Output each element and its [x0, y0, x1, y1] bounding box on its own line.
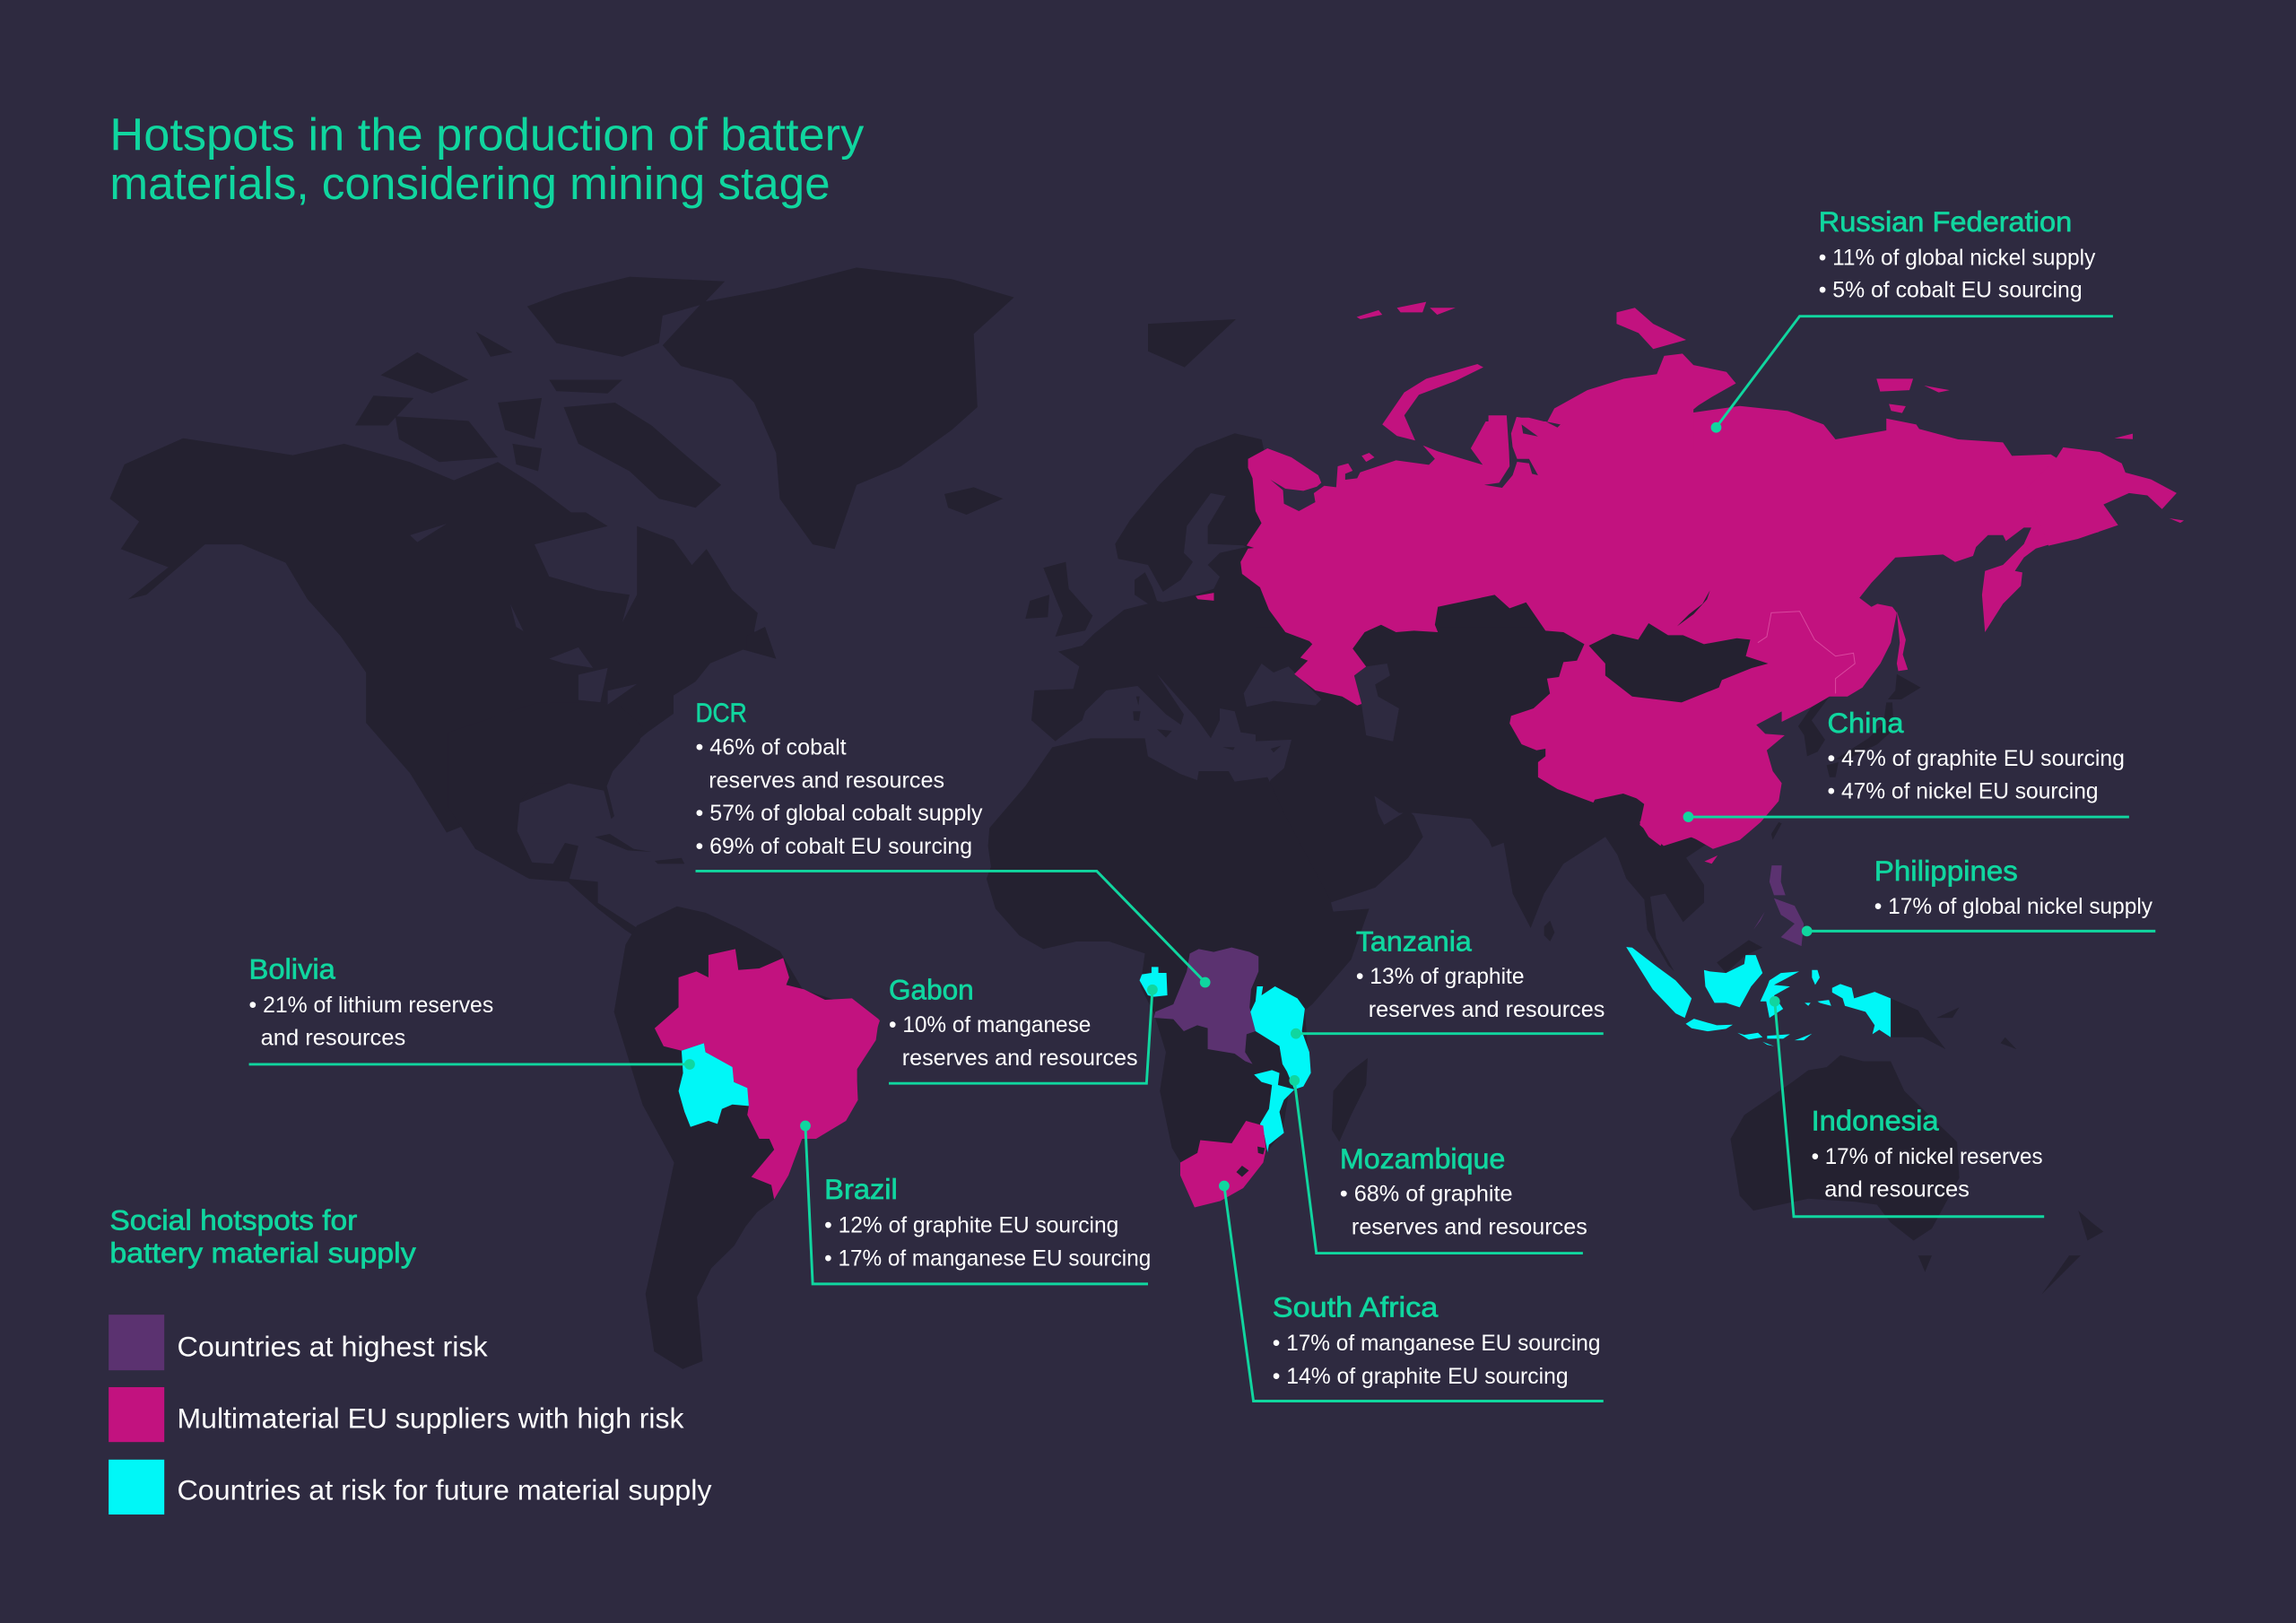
- callout: Russian Federation: Russian Federation: [1819, 206, 2072, 238]
- country: Gabon: [1140, 967, 1168, 997]
- callout: Russian Federation: • 5% of cobalt EU sourcing: [1819, 278, 2083, 302]
- western Russia and western China: [1240, 421, 1713, 846]
- country: South Africa: [1180, 1121, 1266, 1207]
- callout: Bolivia: • 21% of lithium reserves: [249, 994, 493, 1018]
- callout: Bolivia: Bolivia: [249, 953, 336, 985]
- land: North America and Greenland: [109, 267, 1014, 833]
- callout: DCR: • 57% of global cobalt supply: [696, 802, 983, 826]
- callout: Bolivia: [249, 953, 695, 1070]
- callout: Mozambique: reserves and resources: [1352, 1215, 1587, 1239]
- Gulf of Ob: [1484, 415, 1561, 488]
- inland seas of Eurasia: [1244, 664, 1321, 707]
- callout: South Africa: South Africa: [1273, 1292, 1439, 1324]
- callout: South Africa: [1219, 1181, 1604, 1401]
- title: Hotspots in the production of battery: [109, 108, 865, 160]
- land: South America: [614, 907, 880, 1369]
- title: materials, considering mining stage: [109, 158, 831, 209]
- callout: Mozambique: • 68% of graphite: [1340, 1183, 1513, 1207]
- callout: Tanzania: • 13% of graphite: [1356, 965, 1525, 989]
- legend heading: [109, 1204, 416, 1269]
- land: Svalbard: [1148, 319, 1236, 368]
- callout: Gabon: Gabon: [889, 974, 974, 1005]
- callout: China: [1683, 707, 2129, 822]
- callout: Indonesia: Indonesia: [1812, 1105, 1939, 1136]
- country: Mozambique: [1254, 1070, 1294, 1152]
- Mongolia: [1589, 623, 1769, 702]
- callout: DCR: DCR: [696, 699, 747, 728]
- callout: China: China: [1828, 707, 1904, 739]
- legend item: multimaterial EU suppliers: Multimaterial EU suppliers with high risk: [178, 1402, 684, 1435]
- eastern Russia and eastern China: [1632, 386, 2099, 849]
- callout: DCR: reserves and resources: [709, 768, 944, 793]
- callout: Philippines: [1802, 855, 2155, 936]
- callout: Brazil: • 12% of graphite EU sourcing: [824, 1214, 1118, 1238]
- callout: Gabon: [889, 974, 1158, 1083]
- callout: China: • 47% of graphite EU sourcing: [1828, 747, 2125, 771]
- callout: Bolivia: and resources: [261, 1027, 405, 1051]
- callout: Gabon: • 10% of manganese: [889, 1013, 1091, 1037]
- country: Indonesia: [1626, 947, 1891, 1046]
- country: Tanzania: [1250, 986, 1311, 1089]
- callout: DCR: • 69% of cobalt EU sourcing: [696, 835, 972, 859]
- country: Russian Federation and China: [1196, 302, 2184, 864]
- callout: Gabon: reserves and resources: [902, 1046, 1138, 1071]
- legend item: multimaterial EU suppliers: [109, 1387, 684, 1442]
- legend heading: battery material supply: [109, 1237, 416, 1269]
- callout: China: • 47% of nickel EU sourcing: [1828, 780, 2099, 804]
- land: Central Asia: [1336, 571, 1605, 751]
- callout: Tanzania: reserves and resources: [1369, 998, 1605, 1022]
- callout: Philippines: Philippines: [1874, 855, 2018, 887]
- land: Europe: [1025, 433, 1363, 752]
- Lake Baikal and Chinese border: [1677, 590, 1855, 693]
- callout: Mozambique: Mozambique: [1340, 1143, 1505, 1175]
- callout: Indonesia: and resources: [1824, 1178, 1970, 1202]
- callout: Brazil: Brazil: [824, 1174, 898, 1205]
- country: Philippines: [1753, 865, 1804, 946]
- country: Democratic Republic of Congo: [1154, 948, 1258, 1064]
- callout: Indonesia: [1770, 996, 2044, 1217]
- legend heading: Social hotspots for: [109, 1204, 357, 1236]
- callout: Tanzania: [1291, 925, 1605, 1039]
- callout: Brazil: • 17% of manganese EU sourcing: [824, 1246, 1151, 1271]
- title: [109, 108, 865, 209]
- Caspian Sea: [1354, 664, 1399, 742]
- callout: Russian Federation: • 11% of global nickel supply: [1819, 247, 2096, 271]
- land: Oceania and Southeast Asia: [1717, 940, 2103, 1294]
- world map base layer: [109, 267, 2103, 1369]
- Arctic coast, Far East and Russian islands: [1196, 302, 2184, 864]
- callout: Tanzania: Tanzania: [1356, 925, 1473, 957]
- country: Brazil: [655, 949, 880, 1200]
- highlighted countries: [655, 302, 2184, 1207]
- land: Central America and Caribbean: [448, 702, 684, 935]
- callout: DCR: [696, 699, 1211, 987]
- callout: Russian Federation: [1711, 206, 2113, 433]
- country: Bolivia: [679, 1043, 749, 1127]
- legend item: future supply risk: Countries at risk for future material supply: [178, 1474, 712, 1506]
- land: Africa: [987, 738, 1370, 1184]
- callout: South Africa: • 14% of graphite EU sourcing: [1273, 1365, 1569, 1389]
- Kolguev island: [1361, 453, 1375, 462]
- legend item: future supply risk: [109, 1460, 712, 1515]
- lakes of North America: [410, 524, 637, 705]
- legend item: highest risk: [109, 1315, 488, 1370]
- callout: Mozambique: [1289, 1075, 1587, 1254]
- callout: Brazil: [800, 1121, 1151, 1284]
- legend: [109, 1204, 712, 1515]
- land: Middle East, South and Southeast Asia: [1256, 628, 1722, 971]
- callout: Philippines: • 17% of global nickel supply: [1874, 895, 2153, 919]
- land: Korea, Japan, Taiwan: [1771, 674, 1921, 840]
- callout: DCR: • 46% of cobalt: [696, 736, 847, 760]
- legend item: highest risk: Countries at highest risk: [178, 1331, 488, 1363]
- callout: South Africa: • 17% of manganese EU sourcing: [1273, 1332, 1600, 1356]
- callout: Indonesia: • 17% of nickel reserves: [1812, 1145, 2043, 1169]
